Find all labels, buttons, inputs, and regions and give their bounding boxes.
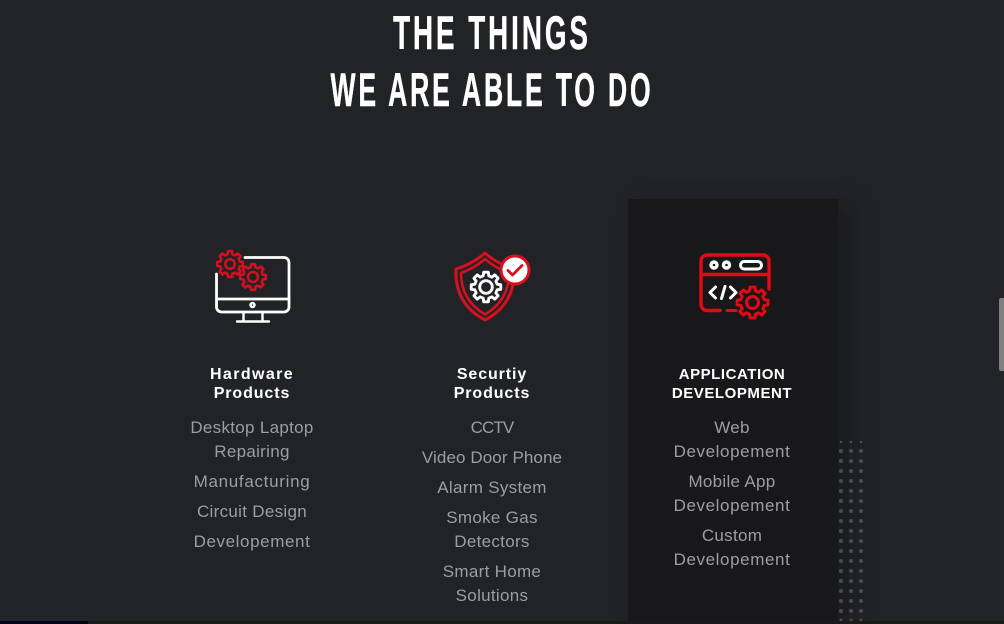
list: application services: Developement (674, 550, 790, 569)
heading: hardware products: Hardware (210, 366, 294, 383)
list: hardware services: Repairing (214, 442, 290, 461)
panel: security products (422, 366, 562, 605)
list: security services (422, 418, 562, 605)
list: application services: Web (714, 418, 750, 437)
heading: hardware products (210, 366, 294, 402)
heading: security products: Products (454, 385, 530, 402)
title: WE ARE ABLE TO DO (331, 63, 653, 116)
panel: hardware products (190, 366, 314, 551)
list: hardware services: Circuit Design (197, 502, 307, 521)
list: security services: Smart Home (443, 562, 541, 581)
panel: highlighted application development card (628, 199, 838, 621)
list: application services: Mobile App (688, 472, 776, 491)
decorative dot grid (839, 440, 863, 621)
heading: application development: DEVELOPMENT (672, 385, 792, 402)
list: security services: CCTV (471, 418, 513, 437)
list: hardware services (190, 418, 314, 551)
list: hardware services: Desktop Laptop (190, 418, 314, 437)
heading: application development (672, 366, 792, 402)
list: hardware services: Developement (194, 532, 310, 551)
list: security services: Smoke Gas (446, 508, 538, 527)
list: security services: Video Door Phone (422, 448, 562, 467)
heading: security products (454, 366, 530, 402)
heading: security products: Securtiy (457, 366, 527, 383)
list: security services: Detectors (454, 532, 530, 551)
list: hardware services: Manufacturing (194, 472, 310, 491)
heading: hardware products: Products (214, 385, 290, 402)
bottom edge strip (0, 621, 1004, 624)
scrollbar thumb (999, 298, 1004, 371)
list: security services: Alarm System (437, 478, 547, 497)
heading: application development: APPLICATION (679, 366, 785, 383)
list: application services: Custom (702, 526, 762, 545)
panel: application development (672, 366, 792, 569)
list: application services: Developement (674, 442, 790, 461)
list: application services: Developement (674, 496, 790, 515)
list: security services: Solutions (456, 586, 528, 605)
title (330, 6, 653, 116)
title: THE THINGS (393, 6, 591, 59)
list: application services (674, 418, 790, 569)
